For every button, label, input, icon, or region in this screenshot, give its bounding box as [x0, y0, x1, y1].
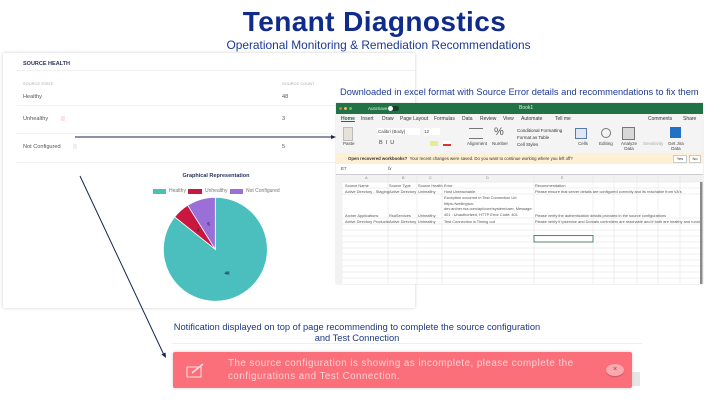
- caption: excel download: Downloaded in excel format with Source Error details and recommendations to fix them: [340, 87, 699, 97]
- pie chart: 5: [207, 222, 210, 226]
- excel cell text: Archer Applications: [345, 213, 378, 218]
- pie chart: [164, 198, 267, 301]
- excel formula bar: E7: [341, 166, 347, 171]
- excel ribbon tools: Format as Table: [517, 135, 549, 140]
- row: unhealthy: [23, 116, 285, 122]
- chart legend: Unhealthy: [205, 188, 228, 194]
- excel ribbon tabs: Comments: [648, 116, 672, 122]
- excel ribbon tools: Conditional Formatting: [517, 128, 562, 133]
- excel ribbon tools: Editing: [599, 141, 613, 146]
- excel cell text: Unhealthy: [418, 213, 436, 218]
- caption: notification: [174, 322, 540, 342]
- excel cell text: A: [365, 175, 368, 180]
- excel cell text: Source Health: [418, 183, 443, 188]
- excel spreadsheet: [336, 175, 703, 284]
- pie chart: 48: [224, 270, 230, 276]
- row: unhealthy: Unhealthy: [23, 116, 48, 122]
- excel ribbon tools: Data: [671, 146, 681, 151]
- excel ribbon tabs: Insert: [361, 116, 374, 122]
- excel ribbon tabs: Draw: [382, 116, 394, 122]
- chart heading: Graphical Representation: [183, 173, 249, 179]
- notification message: configurations and Test Connection.: [228, 371, 400, 382]
- excel ribbon tools: Calibri (Body): [378, 129, 405, 134]
- table header: source count: SOURCE COUNT: [282, 81, 314, 86]
- excel title bar: AutoSave: [368, 106, 388, 111]
- excel screenshot: [336, 103, 703, 284]
- notification message: [228, 358, 574, 382]
- icon: edit: [186, 364, 204, 378]
- close button: ×: [613, 366, 617, 373]
- notification banner: [173, 352, 632, 388]
- excel cell text: Recommendation: [535, 183, 566, 188]
- row: healthy: [23, 94, 288, 100]
- excel cell text: Please verify the authentication details provided in the source configurations: [535, 213, 666, 218]
- excel ribbon tools: 12: [424, 129, 429, 134]
- chart legend: [153, 188, 280, 194]
- excel ribbon tools: [336, 124, 703, 156]
- chart legend: Healthy: [169, 188, 186, 194]
- excel formula bar: fx: [388, 166, 392, 171]
- row: not configured: 5: [282, 144, 285, 150]
- excel ribbon tools: Data: [624, 146, 634, 151]
- close button: [606, 364, 624, 376]
- excel ribbon tools: Paste: [343, 141, 355, 146]
- excel cell text: 401 : Unauthorized, HTTP Error Code: 401: [444, 212, 518, 217]
- excel cell text: RsaServices: [389, 213, 411, 218]
- excel ribbon tools: Cells: [578, 141, 588, 146]
- excel ribbon tools: Alignment: [467, 141, 487, 146]
- notification message: The source configuration is showing as incomplete, please complete the: [228, 358, 574, 369]
- title: Tenant Diagnostics: [243, 6, 506, 37]
- excel cell text: E: [561, 175, 564, 180]
- excel ribbon tabs: Data: [462, 116, 473, 122]
- excel cell text: Source Name: [345, 183, 369, 188]
- excel ribbon tools: %: [494, 126, 504, 138]
- caption: notification: and Test Connection: [315, 332, 399, 342]
- row: unhealthy: 3: [282, 116, 285, 122]
- row: not configured: [23, 144, 285, 150]
- row: healthy: 48: [282, 94, 288, 100]
- excel cell text: B: [402, 175, 405, 180]
- excel ribbon tabs: Review: [480, 116, 496, 122]
- excel ribbon tabs: Page Layout: [400, 116, 428, 122]
- excel cell text: [345, 175, 700, 224]
- excel cell text: Host Unreachable: [444, 189, 475, 194]
- excel ribbon tabs: [336, 114, 703, 124]
- background table remnants: [172, 343, 642, 344]
- panel: source health: [3, 53, 415, 308]
- excel ribbon tools: Get Jira: [668, 141, 684, 146]
- table header: source state: SOURCE STATE: [23, 81, 54, 86]
- excel ribbon tabs: Tell me: [555, 116, 571, 122]
- excel cell text: D: [486, 175, 489, 180]
- excel notice bar: No: [692, 156, 698, 161]
- excel cell text: Please ensure that server details are configured correctly and its reachable from VA's: [535, 189, 682, 194]
- excel ribbon tools: Analyze: [621, 141, 637, 146]
- excel cell text: Active Directory: [389, 189, 416, 194]
- excel cell text: C: [429, 175, 432, 180]
- excel title bar: Book1: [519, 105, 533, 111]
- excel ribbon tabs: Formulas: [434, 116, 455, 122]
- excel ribbon tabs: Share: [683, 116, 696, 122]
- pie chart: 3: [197, 228, 200, 232]
- excel cell text: Error: [444, 183, 453, 188]
- excel ribbon tabs: Home: [341, 116, 355, 122]
- row: not configured: Not Configured: [23, 144, 61, 150]
- excel ribbon tools: Cell Styles: [517, 142, 538, 147]
- excel cell text: Unhealthy: [418, 219, 436, 224]
- subtitle: Operational Monitoring & Remediation Recommendations: [226, 38, 531, 52]
- excel notice bar: Open recovered workbooks? Your recent changes were saved. Do you want to continue working where you left off?: [348, 156, 573, 161]
- arrow: table to notification: [80, 176, 166, 358]
- excel title bar: [336, 103, 703, 114]
- excel cell text: Test Connection is Timing out: [444, 219, 495, 224]
- excel cell text: Source Type: [389, 183, 411, 188]
- arrow: table to excel: [75, 135, 336, 139]
- excel ribbon tabs: Automate: [521, 116, 542, 122]
- excel ribbon tools: B I U: [379, 140, 394, 146]
- chart legend: Not Configured: [246, 188, 280, 194]
- excel notice bar: Yes: [677, 156, 683, 161]
- row: healthy: Healthy: [23, 94, 42, 100]
- excel cell text: dev.archer.rsa.com/api/core/system/user, Message:: [444, 206, 533, 211]
- excel ribbon tabs: View: [503, 116, 514, 122]
- excel notice bar: [336, 153, 703, 164]
- excel cell text: Active Directory - Staging: [345, 189, 389, 194]
- excel cell text: Active Directory: [389, 219, 416, 224]
- excel ribbon tools: Sensitivity: [643, 141, 663, 146]
- excel ribbon tools: Number: [492, 141, 508, 146]
- excel cell text: Unhealthy: [418, 189, 436, 194]
- excel cell text: https://wellington-: [444, 201, 474, 206]
- caption: notification: Notification displayed on top of page recommending to complete the source configuration: [174, 322, 540, 332]
- excel formula bar: [336, 164, 703, 175]
- heading: source health: SOURCE HEALTH: [23, 61, 70, 67]
- excel cell text: Exception occurred in Test Connection Url:: [444, 195, 517, 200]
